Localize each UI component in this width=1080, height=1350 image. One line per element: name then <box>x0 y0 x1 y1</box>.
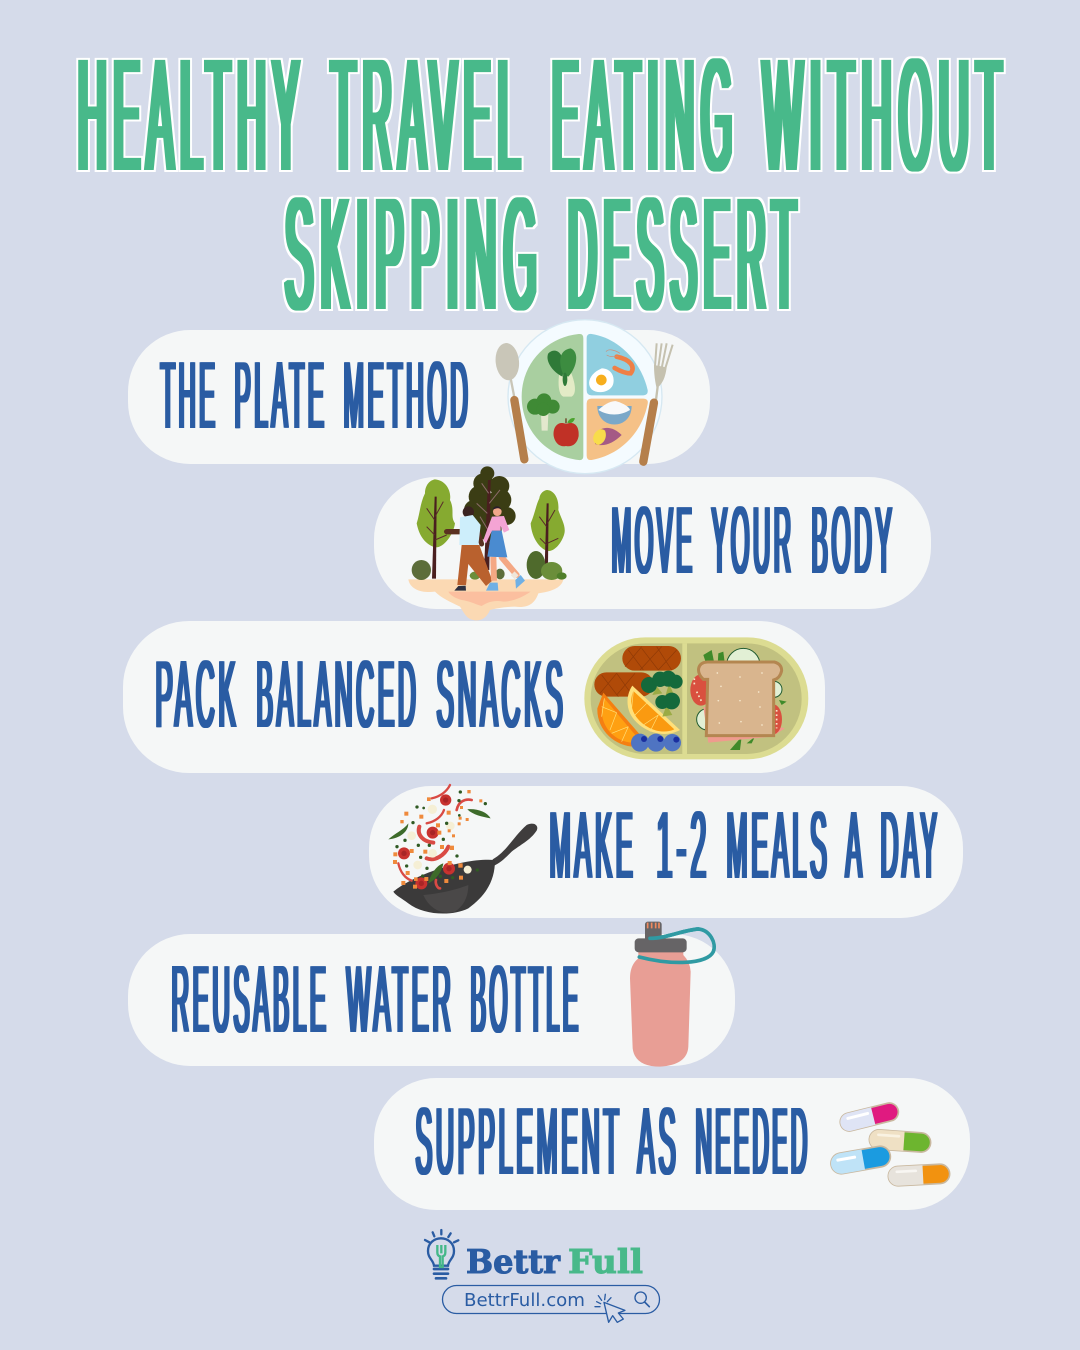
wordmark <box>466 1242 643 1281</box>
panel: reusable water bottle: BOTTLE <box>470 946 581 1053</box>
heading: supplement as needed <box>415 1088 810 1195</box>
panel: supplement as needed <box>374 1078 970 1210</box>
icon: wok tossing vegetables <box>388 785 537 914</box>
heading: make 1-2 meals a day: A <box>845 792 865 899</box>
heading: the plate method: PLATE <box>234 342 327 449</box>
panel: the plate method <box>128 320 710 474</box>
logo: Bettr Full <box>425 1230 660 1322</box>
heading: make 1-2 meals a day: 1-2 <box>656 792 710 899</box>
heading: pack balanced snacks: PACK <box>155 641 239 748</box>
heading: move your body: YOUR <box>711 487 794 594</box>
heading: make 1-2 meals a day: MAKE <box>549 792 636 899</box>
panel: the plate method: METHOD <box>343 342 471 449</box>
panel: reusable water bottle <box>128 922 735 1067</box>
panel: pack balanced snacks <box>123 621 825 773</box>
heading: reusable water bottle <box>171 946 581 1053</box>
icon: couple walking among trees <box>408 466 567 620</box>
heading: the plate method: THE <box>160 342 218 449</box>
icon: colourful capsules <box>829 1101 950 1186</box>
wordmark: Bettr <box>466 1242 561 1281</box>
icon: lunchbox with snacks <box>584 637 808 759</box>
search bar: BettrFull.com <box>464 1290 585 1311</box>
heading: reusable water bottle: REUSABLE <box>171 946 329 1053</box>
wordmark: Full <box>568 1242 643 1281</box>
panel: pack balanced snacks: SNACKS <box>436 641 566 748</box>
icon: pink water bottle <box>630 922 714 1067</box>
search bar <box>442 1286 660 1322</box>
icon: divided plate with spoon and fork <box>494 320 673 474</box>
heading: supplement as needed: AS <box>637 1088 679 1195</box>
heading: reusable water bottle: WATER <box>346 946 454 1053</box>
panel: make 1-2 meals a day <box>369 785 963 918</box>
heading: move your body: MOVE <box>611 487 695 594</box>
icon: lightbulb with fork <box>425 1230 458 1278</box>
title: HEALTHY <box>78 25 306 204</box>
panel: pack balanced snacks: BALANCED <box>256 641 419 748</box>
panel: move your body <box>374 466 931 620</box>
title <box>78 25 1009 343</box>
